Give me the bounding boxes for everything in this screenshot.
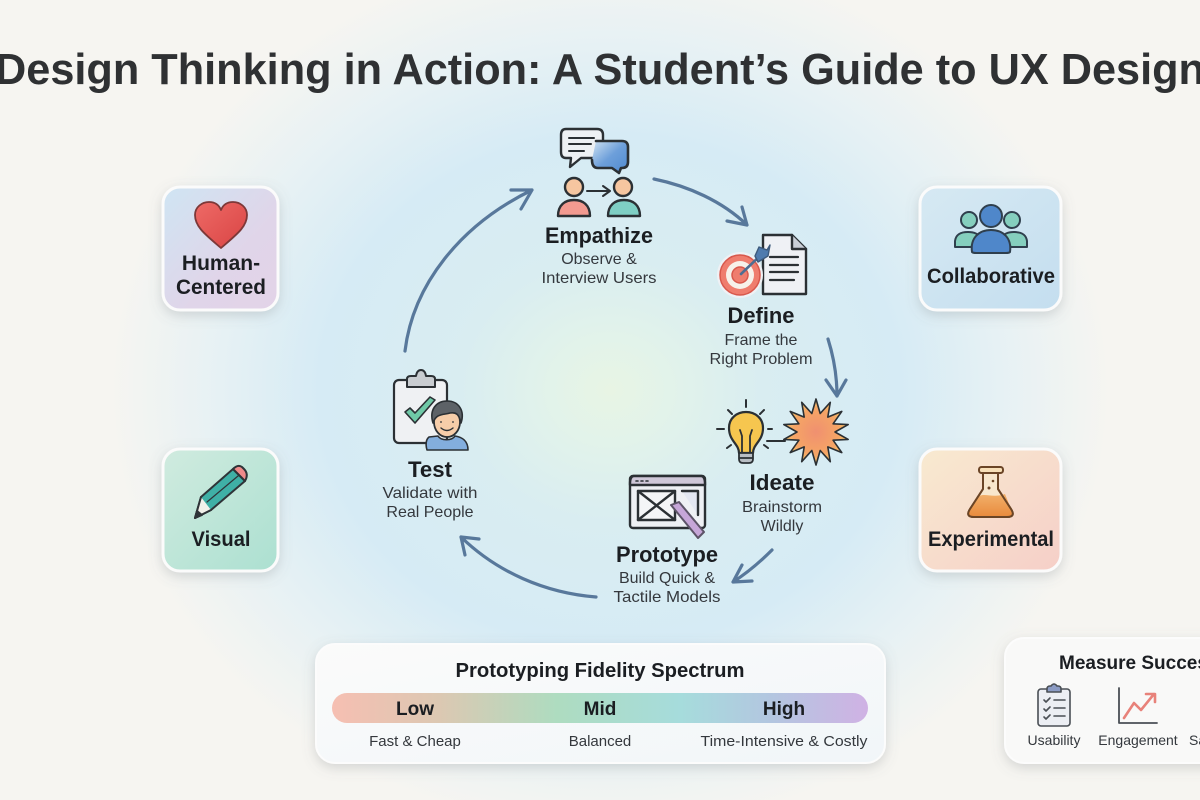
- card: human-centered: [163, 187, 278, 310]
- step: prototype: [614, 476, 720, 606]
- description: ideate: Brainstorm: [742, 499, 822, 516]
- arrow: define to ideate: [826, 339, 846, 396]
- icon: clipboard and smiling user: [394, 370, 468, 450]
- step: define: [710, 235, 812, 368]
- title: Design Thinking in Action: A Student’s Guide to UX Design: [0, 45, 1200, 94]
- card: experimental: [920, 449, 1061, 571]
- step: empathize: [542, 129, 656, 287]
- icon: wireframe window and stylus: [630, 476, 705, 538]
- heading: test: Test: [408, 457, 453, 482]
- step: ideate: [717, 399, 848, 535]
- step: test: [382, 370, 478, 521]
- label: collaborative: Collaborative: [927, 265, 1055, 288]
- description: empathize: [542, 251, 656, 287]
- bar captions: Fast & Cheap: [369, 733, 461, 750]
- heading: define: Define: [728, 303, 794, 328]
- card: collaborative: [920, 187, 1061, 310]
- panel: measure success: [1005, 638, 1200, 763]
- cycle arrows: [405, 179, 846, 597]
- heading: spectrum: Prototyping Fidelity Spectrum: [456, 660, 744, 682]
- description: ideate: Wildly: [761, 518, 803, 535]
- description: prototype: [614, 570, 720, 606]
- description: prototype: Build Quick &: [619, 570, 715, 587]
- bar captions: Balanced: [569, 733, 631, 750]
- icon: engagement line chart: [1119, 688, 1157, 723]
- icon: heart: [195, 202, 247, 248]
- icon: light bulb and burst: [717, 399, 848, 465]
- description: test: Real People: [386, 504, 474, 521]
- icon: flask: [968, 467, 1013, 517]
- description: define: [710, 332, 812, 368]
- label: visual: Visual: [192, 528, 250, 551]
- metric labels: [1028, 732, 1200, 748]
- arrow: test to empathize: [405, 190, 532, 351]
- description: empathize: Observe &: [561, 251, 637, 268]
- icon: pencil: [195, 466, 247, 518]
- arrow: empathize to define: [654, 179, 747, 225]
- heading: ideate: Ideate: [750, 470, 814, 495]
- bar labels: Mid: [584, 699, 616, 720]
- description: prototype: Tactile Models: [614, 589, 720, 606]
- description: define: Right Problem: [710, 351, 812, 368]
- bar labels: [396, 699, 805, 720]
- heading: empathize: Empathize: [545, 223, 653, 248]
- heading: prototype: Prototype: [616, 542, 718, 567]
- description: empathize: Interview Users: [542, 270, 656, 287]
- metric labels: Usability: [1028, 732, 1080, 748]
- description: define: Frame the: [725, 332, 798, 349]
- metric labels: Engagement: [1098, 732, 1178, 748]
- card: visual: [163, 449, 278, 571]
- label: experimental: Experimental: [928, 528, 1054, 551]
- bar captions: Time-Intensive & Costly: [700, 733, 868, 750]
- icon: usability checklist: [1038, 684, 1070, 726]
- bar captions: [369, 733, 868, 750]
- gradient bar: [332, 693, 868, 723]
- description: test: Validate with: [382, 485, 478, 502]
- bar labels: Low: [396, 699, 434, 720]
- description: ideate: [742, 499, 822, 535]
- icon: chat bubbles and users: [558, 129, 640, 216]
- arrow: ideate to prototype: [733, 550, 772, 582]
- panel: prototyping fidelity spectrum: [316, 644, 885, 763]
- icon: target and document: [717, 235, 806, 298]
- icon: team of three: [955, 205, 1027, 253]
- description: test: [382, 485, 478, 521]
- label: human-centered: Centered: [176, 276, 266, 299]
- bar labels: High: [763, 699, 805, 720]
- label: human-centered: Human-: [182, 252, 260, 275]
- arrow: prototype to test: [461, 537, 596, 597]
- label: human-centered: [176, 252, 266, 299]
